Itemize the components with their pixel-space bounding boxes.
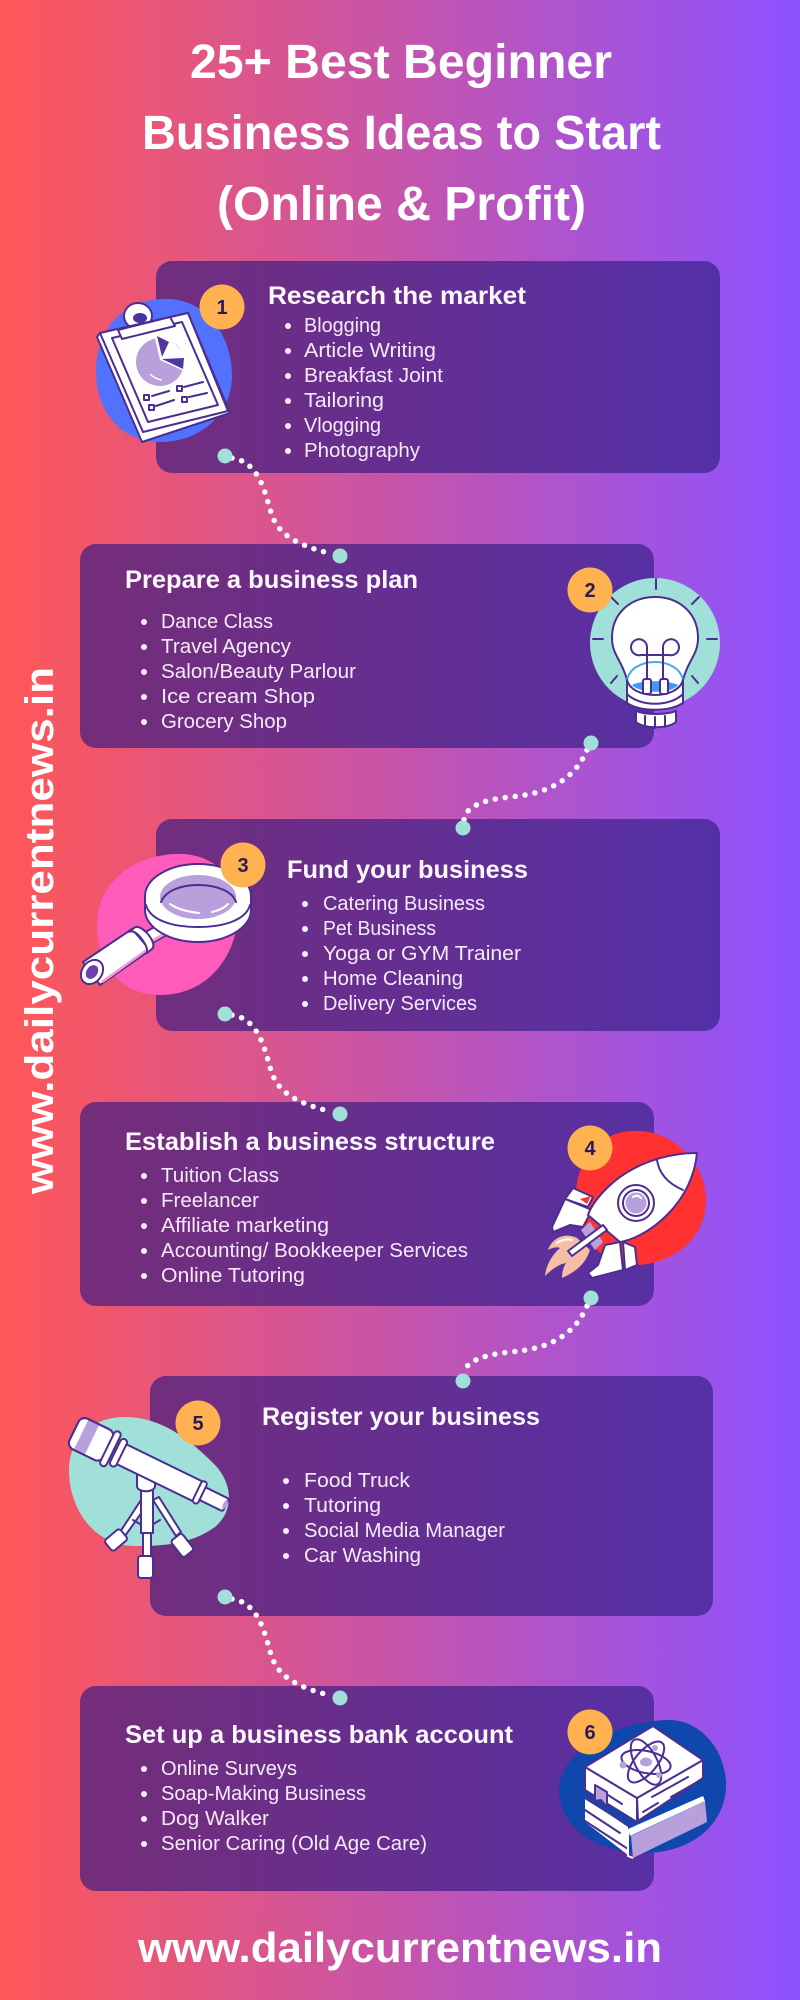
connector 1 to 2 <box>218 448 348 564</box>
list: research the market <box>285 315 443 462</box>
list: fund your business: Yoga or GYM Trainer <box>323 943 521 965</box>
connector 5 to 6 <box>218 1590 348 1706</box>
list: register your business: Food Truck <box>304 1470 411 1492</box>
heading: register your business: Register your business <box>262 1403 540 1431</box>
panel: fund your business <box>156 819 720 1031</box>
heading: fund your business: Fund your business <box>287 856 528 884</box>
step badge 6: 6 <box>584 1722 596 1744</box>
heading: prepare a business plan: Prepare a business plan <box>125 566 418 594</box>
list: set up a business bank account: Senior Caring (Old Age Care) <box>161 1833 427 1855</box>
list: set up a business bank account: Online Surveys <box>161 1758 297 1780</box>
list: establish a business structure: Affiliate marketing <box>161 1215 329 1237</box>
connector 4 to 5 <box>456 1290 598 1388</box>
step badge 1 <box>200 284 244 330</box>
title: (Online & Profit) <box>217 178 586 231</box>
icon: stacked books <box>559 1720 726 1858</box>
icon: magnifying glass <box>76 854 251 995</box>
panel: register your business <box>150 1376 713 1616</box>
footer website: www.dailycurrentnews.in <box>137 1924 662 1971</box>
list: set up a business bank account <box>141 1758 427 1855</box>
list: fund your business: Home Cleaning <box>323 968 463 990</box>
list: prepare a business plan: Ice cream Shop <box>161 686 315 708</box>
connector 3 to 4 <box>218 1006 348 1122</box>
vertical website text: www.dailycurrentnews.in <box>18 667 62 1195</box>
step badge 4 <box>568 1126 612 1170</box>
step badge 2: 2 <box>584 580 596 602</box>
panel: establish a business structure <box>80 1102 654 1306</box>
icon: clipboard with pie chart <box>96 299 232 442</box>
step badge 5 <box>176 1400 220 1446</box>
connector 2 to 3 <box>456 736 598 836</box>
list: register your business: Tutoring <box>304 1495 381 1517</box>
icon: rocket <box>545 1131 706 1278</box>
step badge 4: 4 <box>584 1138 596 1160</box>
step badge 6 <box>568 1710 612 1754</box>
heading: research the market: Research the market <box>268 282 527 310</box>
list: prepare a business plan: Salon/Beauty Parlour <box>161 661 356 683</box>
list: register your business <box>283 1470 505 1567</box>
list: establish a business structure: Accounting/ Bookkeeper Services <box>161 1240 468 1262</box>
step badge 1: 1 <box>216 297 228 319</box>
panel: set up a business bank account <box>80 1686 654 1891</box>
title: Business Ideas to Start <box>142 107 661 160</box>
list: research the market: Vlogging <box>304 415 381 437</box>
list: prepare a business plan <box>141 611 356 733</box>
title: 25+ Best Beginner <box>190 36 612 89</box>
heading: set up a business bank account: Set up a business bank account <box>125 1721 514 1749</box>
step badge 3: 3 <box>237 855 249 877</box>
list: fund your business <box>302 893 521 1015</box>
list: research the market: Breakfast Joint <box>304 365 443 387</box>
list: register your business: Social Media Manager <box>304 1520 505 1542</box>
list: research the market: Photography <box>304 440 420 462</box>
panel: prepare a business plan <box>80 544 654 748</box>
list: prepare a business plan: Dance Class <box>161 611 273 633</box>
step badge 5: 5 <box>192 1413 204 1435</box>
list: fund your business: Catering Business <box>323 893 485 915</box>
icon: light bulb <box>590 578 720 728</box>
list: register your business: Car Washing <box>304 1545 421 1567</box>
list: research the market: Blogging <box>304 315 381 337</box>
list: set up a business bank account: Soap-Making Business <box>161 1783 366 1805</box>
icon: telescope <box>66 1414 235 1578</box>
list: establish a business structure <box>141 1165 468 1287</box>
list: set up a business bank account: Dog Walker <box>161 1808 269 1830</box>
list: establish a business structure: Tuition Class <box>161 1165 279 1187</box>
list: prepare a business plan: Grocery Shop <box>161 711 287 733</box>
list: fund your business: Pet Business <box>323 918 436 940</box>
heading: establish a business structure: Establish a business structure <box>125 1128 495 1156</box>
step badge 2 <box>568 568 612 612</box>
list: establish a business structure: Online Tutoring <box>161 1265 305 1287</box>
list: prepare a business plan: Travel Agency <box>161 636 291 658</box>
list: establish a business structure: Freelancer <box>161 1190 259 1212</box>
list: research the market: Tailoring <box>304 390 384 412</box>
panel: research the market <box>156 261 720 473</box>
title <box>142 36 661 231</box>
list: research the market: Article Writing <box>304 340 436 362</box>
list: fund your business: Delivery Services <box>323 993 477 1015</box>
step badge 3 <box>220 842 266 888</box>
